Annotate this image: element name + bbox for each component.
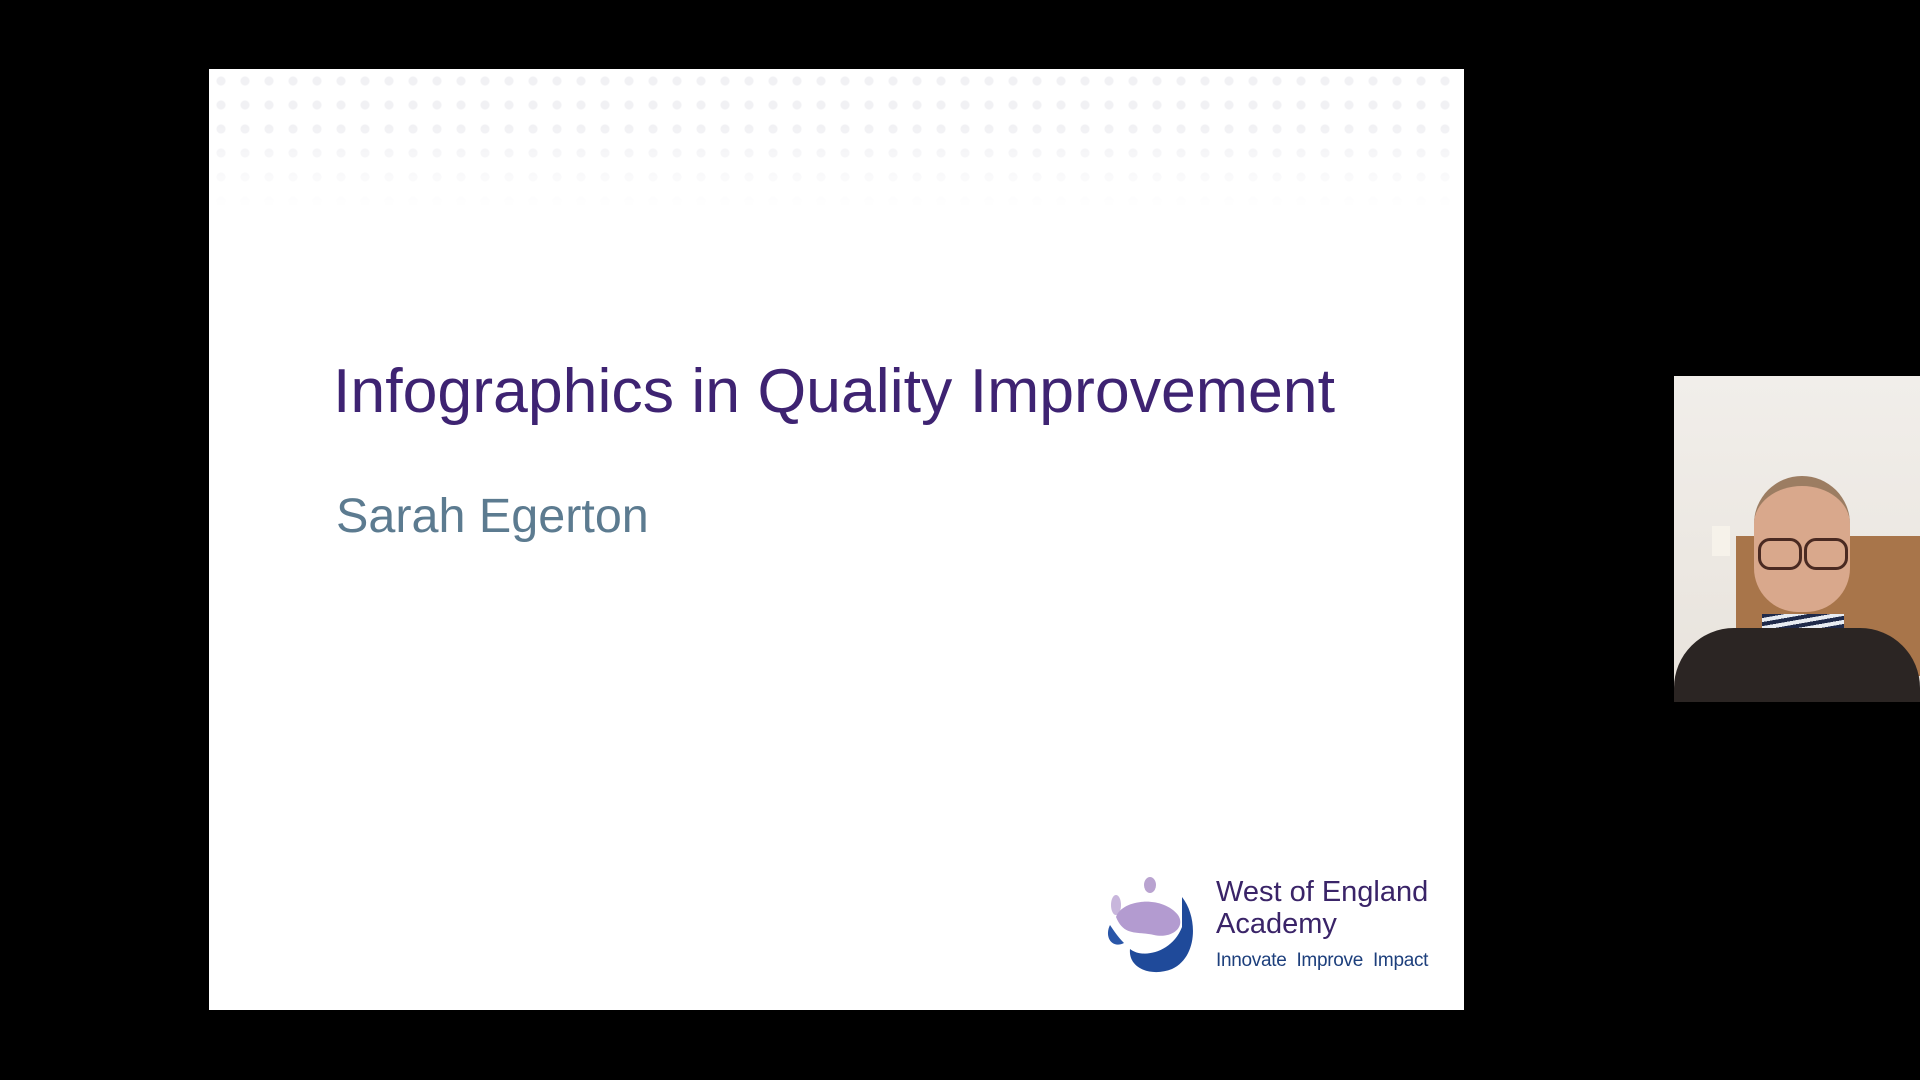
icon: logo mark (1108, 877, 1193, 972)
panel: slide (209, 69, 1464, 1010)
dresser (1736, 536, 1920, 676)
sweater (1674, 628, 1920, 718)
collar (1762, 614, 1844, 642)
tagline: Innovate Improve Impact (1216, 950, 1428, 971)
logo text: West of England (1216, 876, 1428, 908)
logo text (1216, 876, 1428, 940)
lamp (1712, 526, 1730, 556)
subtitle: presenter name: Sarah Egerton (336, 489, 649, 543)
logo text: Academy (1216, 908, 1337, 940)
glasses (1758, 538, 1802, 570)
title: Infographics in Quality Improvement (333, 356, 1335, 426)
logo: West of England Academy (1108, 876, 1428, 972)
dotted header band (216, 76, 1450, 157)
webcam video: presenter (1674, 376, 1920, 702)
head (1754, 476, 1850, 612)
